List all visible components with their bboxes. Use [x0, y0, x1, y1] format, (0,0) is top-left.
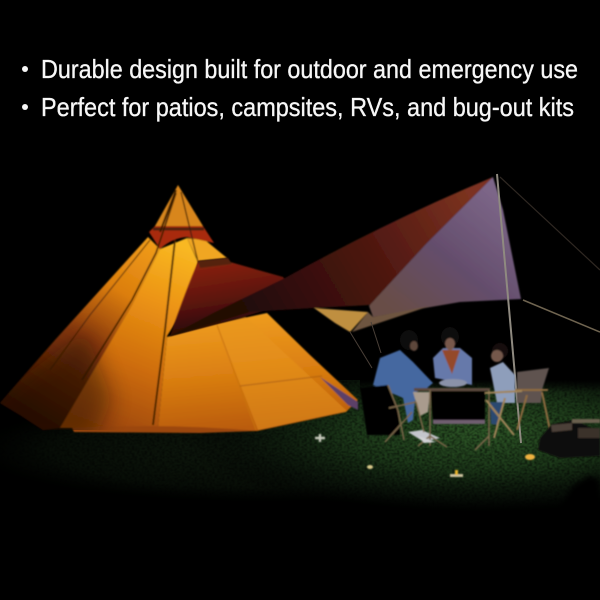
near chair frame	[385, 385, 489, 450]
person: child in white	[490, 343, 515, 425]
firewood pile	[538, 419, 600, 458]
tent: top cap	[155, 185, 203, 226]
table cloth	[413, 392, 430, 416]
main pole	[497, 174, 521, 443]
tent: left shaded panel	[0, 237, 160, 430]
tent: purple trim	[320, 377, 358, 410]
dark foreground shrub	[548, 475, 600, 530]
tent: lower-left shadow	[0, 330, 112, 445]
shoes	[418, 436, 436, 443]
flap and tarp	[170, 177, 521, 336]
lantern glow by the firewood	[525, 454, 535, 460]
upper guy line	[500, 177, 600, 270]
lower guy line	[523, 300, 600, 332]
near chair	[360, 385, 400, 435]
pole and guy lines	[350, 174, 600, 443]
tent: upper right wedge	[187, 238, 227, 261]
table lower strip	[433, 420, 485, 424]
table top	[414, 388, 490, 391]
bullet list heading	[22, 54, 578, 122]
rear chair	[517, 368, 549, 403]
tent: guy seams	[50, 190, 322, 430]
tent: lower right panel	[158, 313, 358, 431]
left guy lines	[350, 322, 381, 368]
person: woman in blue with orange scarf	[433, 327, 472, 385]
tent: lit seam panel	[217, 316, 347, 430]
logs	[572, 419, 600, 423]
flap top band	[198, 258, 232, 268]
illuminated tent	[0, 185, 358, 433]
child's chair frame	[485, 391, 522, 438]
tent: centre panel	[60, 238, 198, 428]
lantern by the tent	[315, 434, 325, 442]
tarp: underside brown	[352, 306, 430, 332]
rear chair legs	[515, 390, 550, 430]
small lantern	[367, 465, 373, 469]
table	[430, 390, 485, 421]
tarp: underside lit corner	[314, 308, 368, 332]
tent: band seam	[153, 228, 204, 230]
glass jars	[439, 379, 467, 387]
tent flap	[170, 262, 300, 336]
ground lanterns	[315, 434, 535, 477]
ground: night grass	[0, 380, 600, 530]
tent: hem	[72, 426, 258, 433]
tarp: lit purple side	[369, 177, 521, 317]
lantern in the centre	[450, 470, 463, 477]
people at the table	[360, 327, 550, 450]
tent: red band	[149, 226, 214, 249]
tarp: dark red side	[170, 177, 493, 336]
person: man in blue shirt	[373, 330, 440, 442]
